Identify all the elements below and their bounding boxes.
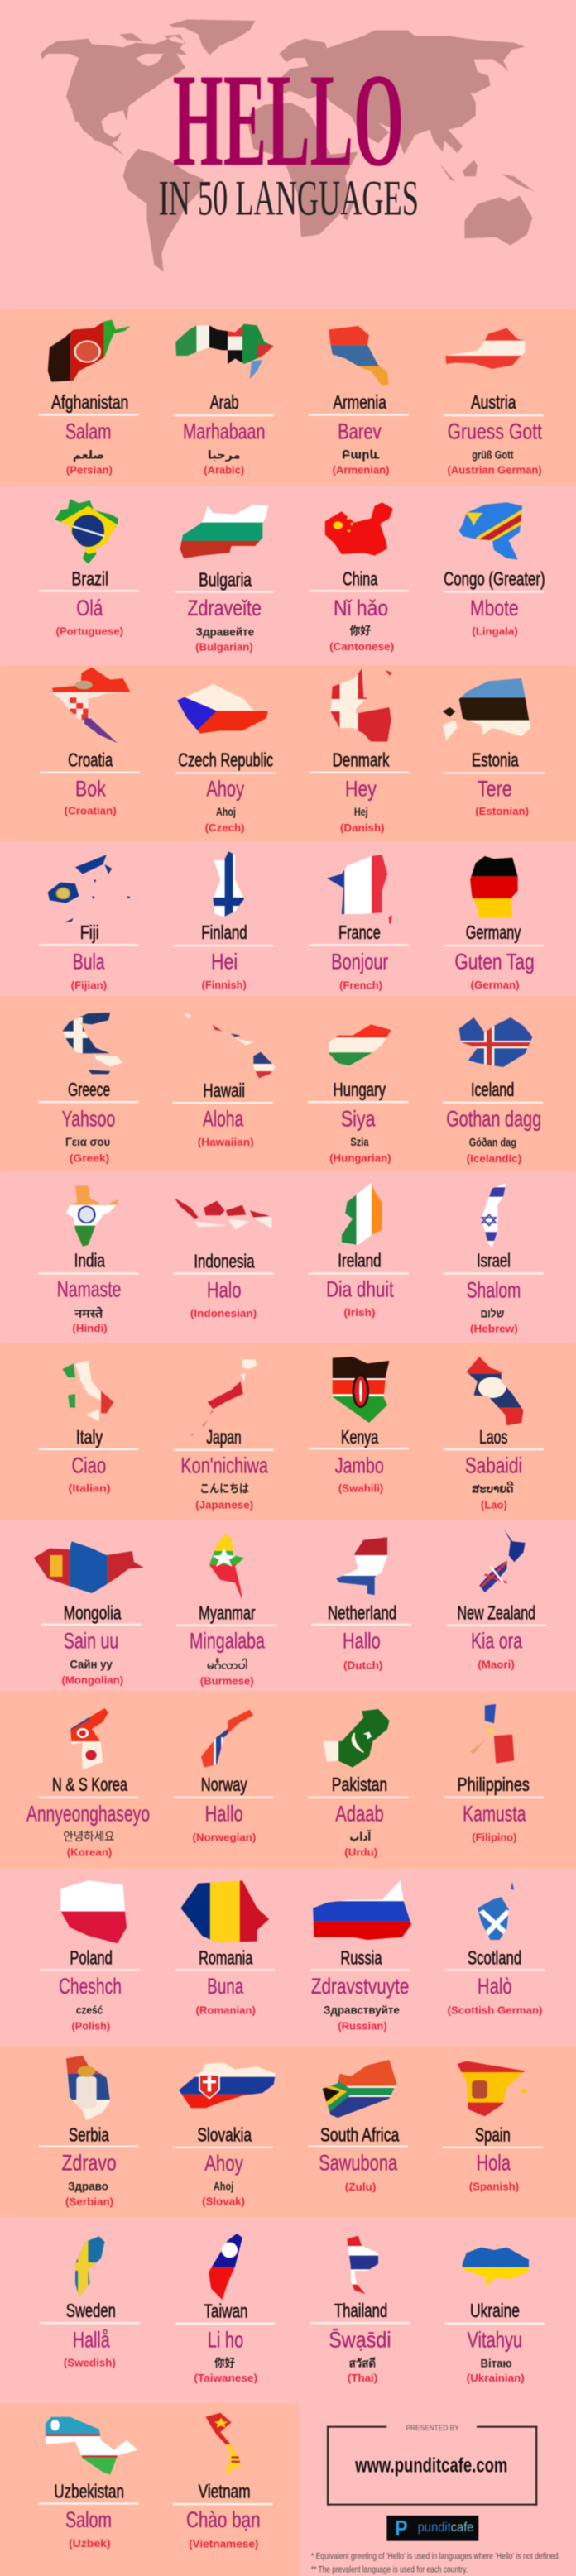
card: Slovakia	[173, 2061, 277, 2208]
flag: Finland	[212, 850, 245, 917]
country name: Mongolia	[64, 1602, 122, 1623]
country name: Scotland	[468, 1947, 521, 1968]
country name: Vietnam	[199, 2481, 251, 2502]
flag: Israel	[478, 1180, 509, 1249]
card: France	[309, 852, 409, 992]
native script: Γεια σου	[65, 1136, 110, 1148]
language: (Serbian)	[65, 2197, 113, 2208]
flag: Ukraine	[459, 2246, 530, 2289]
flag: Netherland	[334, 1535, 391, 1597]
language: (Uzbek)	[69, 2539, 111, 2550]
card: Kenya	[309, 1354, 409, 1495]
flag: Ireland	[341, 1183, 382, 1246]
greeting: Zdraveǐte	[187, 596, 262, 620]
card: Hawaii	[173, 1013, 279, 1148]
greeting: Aloha	[203, 1107, 244, 1132]
card: Ukraine	[445, 2246, 545, 2384]
band: row 1	[0, 309, 576, 486]
card: Croatia	[40, 664, 140, 817]
logo	[386, 2516, 478, 2541]
card: Sweden	[40, 2235, 140, 2369]
language: (Croatian)	[65, 806, 117, 817]
logo: P	[395, 2516, 408, 2540]
country name: Pakistan	[332, 1774, 387, 1795]
language: (Mongolian)	[62, 1675, 123, 1687]
card: Congo (Greater)	[444, 499, 545, 638]
native script: မင်္ဂလာပါ	[207, 1657, 248, 1672]
language: (Filipino)	[472, 1832, 516, 1844]
country name: Myanmar	[199, 1602, 256, 1623]
country name: N & S Korea	[52, 1774, 127, 1795]
country name: Germany	[466, 922, 521, 943]
flag: Fiji	[48, 855, 131, 922]
flag: Iceland	[458, 1017, 533, 1068]
card: Russia	[310, 1879, 413, 2033]
flag: Congo	[458, 501, 523, 561]
greeting: Nǐ hǎo	[334, 596, 388, 620]
language: (Icelandic)	[467, 1154, 521, 1165]
card: Afghanistan	[36, 317, 138, 476]
greeting: Sabaidi	[465, 1453, 522, 1478]
flag: Austria	[445, 328, 526, 369]
country name: France	[338, 922, 381, 943]
flag: Mongolia	[31, 1539, 146, 1595]
greeting: Buna	[207, 1974, 244, 1999]
greeting: Barev	[338, 419, 382, 444]
native script: cześć	[76, 2004, 103, 2017]
flag: Arab	[173, 323, 276, 379]
card: Germany	[444, 855, 544, 991]
country name: Austria	[471, 392, 516, 413]
greeting: Olá	[76, 596, 103, 620]
band: row 3	[0, 665, 576, 841]
country name: Arab	[210, 392, 238, 413]
country name: Ireland	[338, 1250, 382, 1271]
language: (Japanese)	[195, 1500, 253, 1511]
country name: Norway	[201, 1774, 247, 1795]
country name: Philippines	[458, 1774, 530, 1795]
greeting: Hei	[211, 950, 238, 974]
card: Romania	[175, 1879, 275, 2017]
language: (Spanish)	[469, 2181, 519, 2193]
country name: Czech Republic	[178, 749, 273, 771]
flag: Pakistan	[319, 1707, 392, 1769]
card: Ireland	[309, 1180, 409, 1319]
language: (Zulu)	[345, 2182, 376, 2193]
native script: Ahoj	[214, 2180, 233, 2193]
greeting: Hallå	[73, 2328, 110, 2352]
native script: صلعم	[73, 448, 104, 462]
card: Greece	[39, 1011, 138, 1165]
greeting: Yahsoo	[62, 1107, 115, 1132]
greeting: Namaste	[57, 1277, 121, 1302]
presented-by frame	[327, 2426, 537, 2506]
native script: ສະບາຍດີ	[472, 1482, 514, 1496]
language: (French)	[339, 980, 382, 992]
language: (Irish)	[343, 1308, 376, 1319]
greeting: Chào bạn	[186, 2507, 261, 2532]
language: (Swedish)	[64, 2358, 116, 2369]
language: (German)	[471, 980, 520, 991]
native script: Здраво	[68, 2180, 108, 2193]
flag: Poland	[57, 1879, 128, 1945]
flag: Denmark	[330, 668, 392, 743]
language: (Armenian)	[333, 465, 389, 476]
logo: punditcafe	[418, 2520, 474, 2534]
country name: Kenya	[341, 1427, 378, 1448]
flag: Armenia	[328, 326, 389, 386]
greeting: Shalom	[467, 1278, 521, 1303]
native script: آداب	[349, 1829, 371, 1843]
flag: France	[324, 852, 392, 924]
flag: Slovakia	[176, 2061, 277, 2109]
greeting: Salam	[65, 419, 111, 444]
card: Scotland	[445, 1880, 545, 2017]
greeting: Bok	[75, 777, 106, 802]
flag: Spain	[455, 2060, 527, 2118]
native script: Szia	[350, 1136, 369, 1148]
language: (Italian)	[69, 1483, 111, 1495]
language: (Polish)	[72, 2021, 110, 2033]
header	[41, 19, 535, 271]
flag: Greece	[62, 1012, 123, 1075]
country name: Romania	[199, 1947, 252, 1968]
language: (Romanian)	[196, 2005, 256, 2017]
card: Pakistan	[309, 1707, 409, 1859]
band: row 11	[0, 2046, 576, 2217]
card: Laos	[444, 1354, 544, 1511]
card: India	[39, 1183, 138, 1334]
card: Taiwan	[175, 2232, 275, 2384]
flag: Scotland	[476, 1880, 516, 1942]
flag: Kenya	[329, 1354, 391, 1424]
flag: Brazil	[55, 498, 119, 564]
greeting: Halo	[207, 1278, 242, 1303]
country name: Denmark	[333, 749, 390, 771]
card: Finland	[173, 850, 274, 991]
greeting: Li ho	[208, 2328, 243, 2352]
card: Poland	[40, 1879, 140, 2033]
country name: Thailand	[334, 2301, 387, 2321]
native script: 你好	[349, 625, 371, 638]
country name: Uzbekistan	[54, 2481, 124, 2502]
language: (Danish)	[340, 823, 385, 834]
language: (Hindi)	[72, 1324, 108, 1334]
flag: Uzbekistan	[42, 2416, 140, 2476]
greeting: Salom	[65, 2507, 112, 2532]
presented by: PRESENTED BY	[406, 2424, 459, 2433]
card: Estonia	[441, 676, 545, 817]
language: (Fijian)	[71, 980, 107, 992]
flag: Afghanistan	[47, 319, 131, 382]
greeting: Marhabaan	[183, 419, 265, 444]
language: (Hungarian)	[329, 1153, 391, 1165]
card: Fiji	[39, 855, 138, 992]
card: Brazil	[39, 496, 139, 638]
flag: Vietnam	[204, 2411, 242, 2476]
language: (Russian)	[338, 2021, 387, 2033]
card: Italy	[39, 1361, 138, 1495]
flag: Italy	[62, 1361, 114, 1421]
country name: Spain	[475, 2124, 511, 2145]
native script: Здравствуйте	[324, 2004, 400, 2017]
greeting: Bula	[73, 950, 105, 974]
language: (Maori)	[478, 1659, 515, 1671]
greeting: Zdravstvuyte	[311, 1974, 409, 1999]
country name: Russia	[340, 1947, 382, 1968]
country name: Israel	[477, 1250, 511, 1271]
greeting: Hey	[345, 777, 377, 802]
country name: Hawaii	[203, 1080, 245, 1101]
card: Israel	[444, 1180, 544, 1335]
language: (Korean)	[67, 1847, 112, 1859]
country name: Greece	[68, 1080, 110, 1100]
card: Philippines	[444, 1704, 544, 1844]
greeting: Annyeonghaseyo	[26, 1802, 150, 1827]
flag: Sweden	[74, 2235, 107, 2298]
card: Uzbekistan	[39, 2416, 140, 2550]
native script: नमस्ते	[74, 1306, 103, 1320]
country name: Fiji	[80, 922, 99, 943]
footer panel	[311, 2424, 560, 2574]
language: (Norwegian)	[193, 1832, 256, 1844]
world map	[41, 19, 535, 271]
card: Czech Republic	[173, 681, 275, 834]
language: (Burmese)	[200, 1676, 254, 1688]
greeting: Bonjour	[331, 950, 388, 974]
native script: こんにちは	[199, 1479, 249, 1496]
language: (Lao)	[481, 1500, 507, 1511]
native script: Вітаю	[480, 2358, 512, 2370]
language: (Portuguese)	[55, 626, 123, 638]
greeting: Tere	[478, 777, 512, 802]
band: row 9	[0, 1691, 576, 1869]
country name: Finland	[201, 922, 247, 943]
country name: Croatia	[68, 749, 113, 771]
language: (Estonian)	[475, 807, 529, 817]
greeting: Hola	[477, 2151, 511, 2175]
language: (Cantonese)	[329, 642, 394, 653]
language: (Lingala)	[472, 626, 518, 638]
native script: مرحبا	[208, 448, 241, 462]
country name: Hungary	[334, 1080, 386, 1100]
card: Arab	[173, 323, 276, 476]
flag: India	[66, 1185, 118, 1247]
greeting: Siya	[341, 1107, 376, 1132]
flag: Germany	[469, 855, 518, 919]
card: Iceland	[443, 1015, 543, 1165]
flag: Thailand	[345, 2234, 380, 2296]
country name: South Africa	[320, 2124, 400, 2145]
card: Vietnam	[173, 2411, 273, 2550]
native script: 你好	[214, 2358, 235, 2370]
greeting: Ahoy	[206, 777, 244, 802]
language: (Indonesian)	[190, 1309, 257, 1319]
greeting: Cheshch	[59, 1974, 122, 1999]
country name: Indonesia	[194, 1251, 255, 1272]
greeting: Vitahyu	[468, 2328, 522, 2352]
language: (Czech)	[205, 823, 245, 834]
band: row 13 left	[0, 2403, 299, 2576]
country name: China	[343, 568, 377, 589]
greeting: Kia ora	[471, 1629, 522, 1653]
language: (Austrian German)	[448, 465, 542, 476]
flag: Indonesia	[175, 1198, 271, 1230]
greeting: Adaab	[335, 1802, 384, 1827]
flag: Estonia	[441, 676, 533, 742]
language: (Bulgarian)	[195, 642, 253, 654]
card: Armenia	[309, 323, 409, 476]
country name: Brazil	[72, 568, 108, 589]
card: Hungary	[308, 1023, 409, 1165]
band: row 5	[0, 996, 576, 1171]
flag: China	[325, 502, 393, 556]
country name: Laos	[479, 1427, 507, 1448]
flag: Taiwan	[206, 2232, 244, 2301]
card: China	[309, 502, 409, 653]
greeting: Mbote	[470, 596, 519, 620]
flag: Serbia	[62, 2054, 112, 2122]
native script: Góðan dag	[469, 1137, 516, 1149]
card: Serbia	[39, 2054, 138, 2208]
language: (Hawaiian)	[198, 1137, 254, 1148]
greeting: Ciao	[72, 1453, 106, 1478]
native script: grüß Gott	[472, 448, 514, 462]
language: (Vietnamese)	[189, 2539, 258, 2550]
language: (Hebrew)	[470, 1324, 518, 1335]
country name: India	[74, 1250, 105, 1271]
language: (Urdu)	[344, 1847, 377, 1859]
country name: Italy	[76, 1427, 103, 1448]
card: Indonesia	[173, 1198, 274, 1319]
flag: Hawaii	[184, 1013, 279, 1080]
country name: Estonia	[472, 749, 519, 771]
flag: Romania	[178, 1879, 271, 1944]
country name: Iceland	[471, 1080, 514, 1100]
language: (Thai)	[348, 2373, 377, 2384]
flag: Japan	[191, 1359, 257, 1436]
native script: 안녕하세요	[63, 1827, 114, 1844]
country name: Netherland	[328, 1602, 396, 1623]
language: (Taiwanese)	[194, 2373, 257, 2384]
language: (Ukrainian)	[467, 2373, 525, 2384]
card: Austria	[441, 325, 544, 476]
native script: Ahoj	[216, 806, 236, 818]
language: (Persian)	[66, 465, 113, 476]
language: (Swahili)	[338, 1483, 383, 1495]
greeting: Zdravo	[62, 2151, 117, 2175]
flag: Laos	[463, 1354, 529, 1427]
country name: Japan	[206, 1427, 242, 1448]
card: New Zealand	[446, 1529, 546, 1671]
flag: Hungary	[328, 1024, 391, 1066]
country name: Taiwan	[204, 2301, 248, 2322]
flag: Korea	[68, 1707, 110, 1772]
country name: Slovakia	[197, 2124, 252, 2145]
flag: Philippines	[470, 1704, 514, 1764]
flag: Norway	[199, 1708, 255, 1769]
greeting: S̄wạs̄di	[329, 2328, 391, 2352]
country name: Afghanistan	[51, 392, 128, 413]
greeting: Kon'nichiwa	[180, 1453, 268, 1478]
card: Denmark	[310, 666, 410, 834]
card: Norway	[173, 1708, 274, 1844]
greeting: Hallo	[343, 1629, 381, 1653]
native script: שלום	[480, 1307, 504, 1320]
flag: Czech Republic	[177, 683, 268, 735]
greeting: Sain uu	[64, 1629, 118, 1653]
greeting: Kamusta	[463, 1802, 526, 1827]
language: (Greek)	[70, 1153, 109, 1165]
band: row 7	[0, 1343, 576, 1520]
language: (Dutch)	[343, 1660, 382, 1672]
card: Bulgaria	[174, 502, 275, 654]
language: (Slovak)	[202, 2196, 245, 2208]
native script: Բարև	[342, 448, 380, 462]
language: (Finnish)	[202, 980, 247, 991]
greeting: Sawubona	[319, 2151, 398, 2175]
native script: Сайн уу	[70, 1659, 113, 1671]
card: Japan	[173, 1359, 274, 1511]
card: Netherland	[311, 1535, 411, 1672]
flag: Bulgaria	[179, 505, 268, 559]
language: (Scottish German)	[448, 2005, 543, 2017]
language: (Arabic)	[204, 465, 244, 476]
flag: Croatia	[51, 667, 131, 743]
flag: South Africa	[319, 2058, 399, 2119]
flag: Russia	[310, 1879, 413, 1942]
card: Spain	[443, 2060, 543, 2193]
card: Myanmar	[176, 1530, 276, 1688]
flag: New Zealand	[479, 1529, 526, 1592]
country name: Armenia	[334, 392, 386, 413]
greeting: Jambo	[335, 1453, 384, 1478]
greeting: Ahoy	[204, 2151, 243, 2176]
card: South Africa	[308, 2058, 408, 2193]
native script: สวัสดี	[349, 2357, 376, 2370]
country name: Ukraine	[470, 2301, 520, 2321]
greeting: Dia dhuit	[326, 1277, 394, 1302]
greeting: Hallo	[205, 1802, 243, 1827]
native script: Hej	[354, 806, 368, 818]
country name: Sweden	[66, 2301, 116, 2321]
greeting: Halò	[478, 1974, 512, 1999]
card: Mongolia	[31, 1539, 146, 1687]
country name: Poland	[70, 1947, 113, 1968]
card: Thailand	[310, 2234, 410, 2384]
greeting: Mingalaba	[190, 1629, 265, 1653]
card: N & S Korea	[26, 1707, 150, 1859]
country name: Bulgaria	[199, 569, 252, 590]
country name: Serbia	[69, 2124, 109, 2145]
native script: Здравейте	[196, 625, 254, 639]
flag: Myanmar	[206, 1530, 246, 1602]
